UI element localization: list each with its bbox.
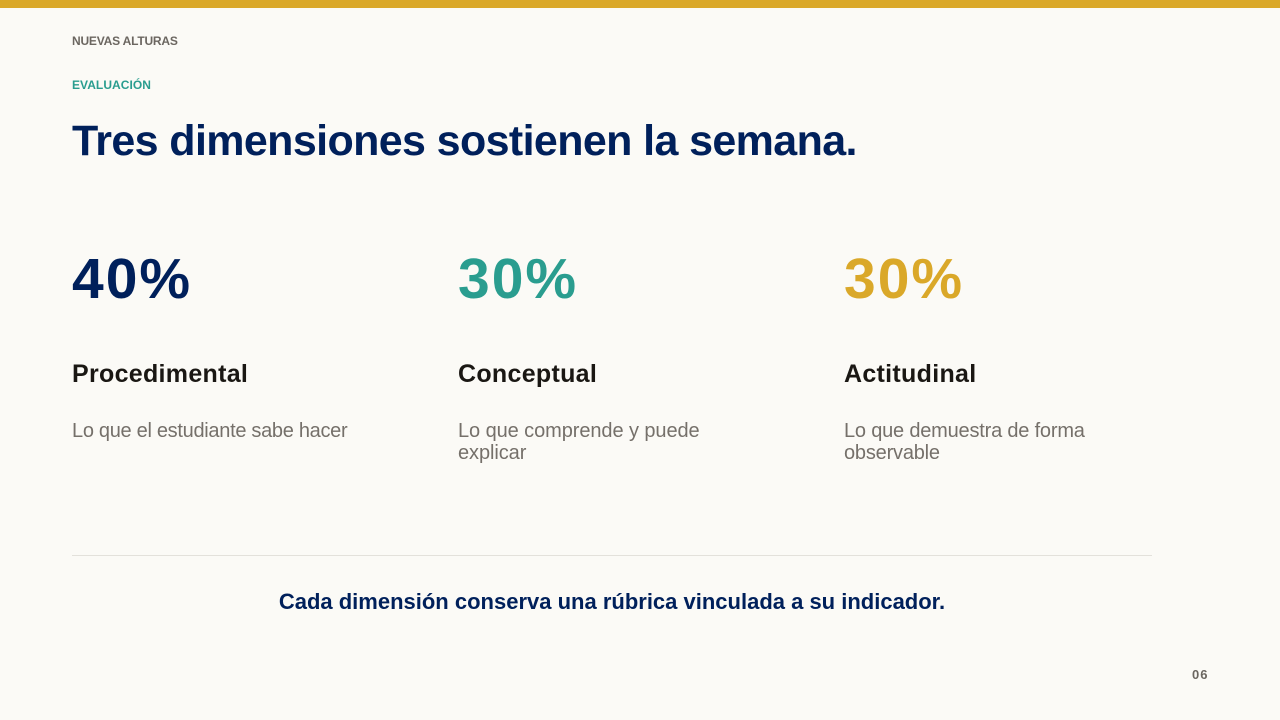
title: Tres dimensiones sostienen la semana. bbox=[72, 117, 857, 165]
description: actitudinal: observable bbox=[844, 442, 940, 464]
heading: conceptual: Conceptual bbox=[458, 360, 597, 388]
closing statement: Cada dimensión conserva una rúbrica vinculada a su indicador. bbox=[279, 589, 945, 614]
description: conceptual: explicar bbox=[458, 442, 526, 464]
column: actitudinal bbox=[844, 247, 1085, 464]
stat: 30% gold: 30% bbox=[844, 247, 964, 311]
stat: 30% teal: 30% bbox=[458, 247, 578, 311]
column: conceptual bbox=[458, 247, 700, 464]
description: actitudinal: Lo que demuestra de forma bbox=[844, 420, 1085, 442]
brand label: NUEVAS ALTURAS bbox=[72, 34, 178, 48]
description: procedimental: Lo que el estudiante sabe hacer bbox=[72, 420, 347, 442]
heading: actitudinal: Actitudinal bbox=[844, 360, 976, 388]
stat: 40%: 40% bbox=[72, 247, 192, 311]
section label: EVALUACIÓN bbox=[72, 78, 151, 92]
description: actitudinal bbox=[844, 420, 1085, 464]
page number: 06 bbox=[1192, 667, 1208, 682]
heading: procedimental: Procedimental bbox=[72, 360, 248, 388]
column: procedimental bbox=[72, 247, 348, 442]
top accent bar bbox=[0, 0, 1280, 8]
description: conceptual bbox=[458, 420, 700, 464]
description: conceptual: Lo que comprende y puede bbox=[458, 420, 700, 442]
